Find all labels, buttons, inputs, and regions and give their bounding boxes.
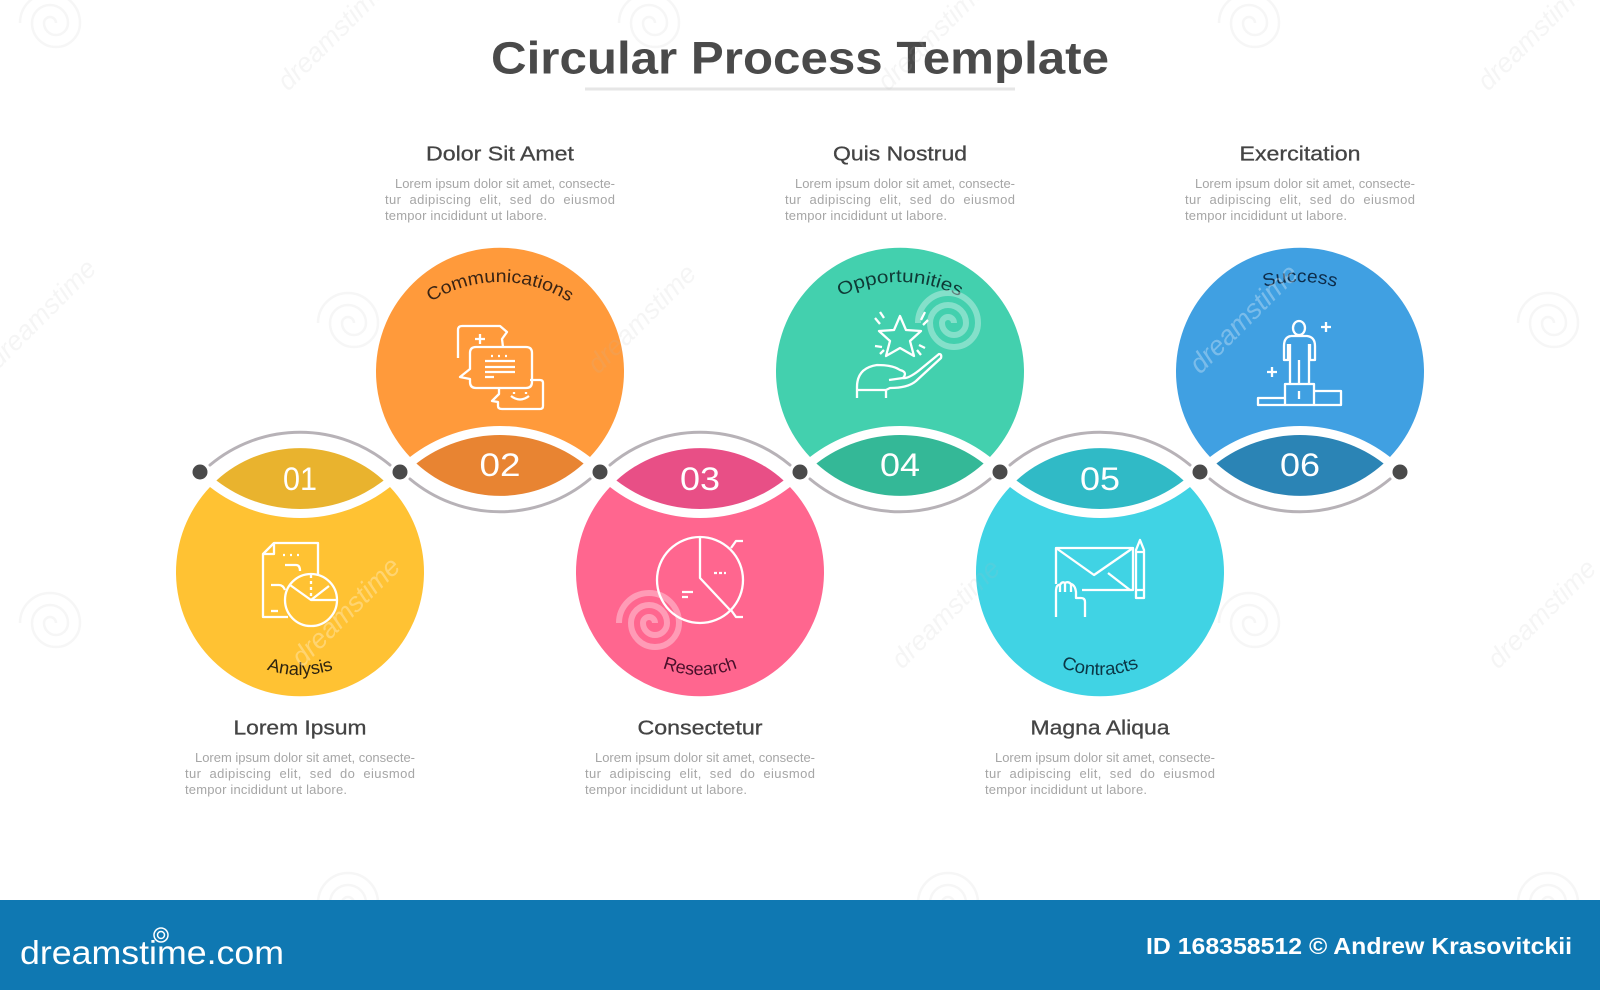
- step 03: research: [576, 430, 824, 696]
- step 06: success: [1176, 248, 1424, 514]
- text block: Lorem Ipsum: Lorem ipsum dolor sit amet, consecte-: [195, 750, 415, 765]
- text block: Lorem Ipsum: tur adipiscing elit, sed do eiusmod: [185, 766, 415, 781]
- footer credit: ID 168358512 © Andrew Krasovitckii: [1146, 933, 1572, 959]
- number 02: 02: [480, 447, 520, 483]
- text block: Magna Aliqua: Lorem ipsum dolor sit amet, consecte-: [995, 750, 1215, 765]
- text block: Quis Nostrud: Quis Nostrud: [833, 142, 967, 166]
- curved label: Research: Research: [664, 656, 736, 676]
- text block: Dolor Sit Amet: Dolor Sit Amet: [426, 142, 574, 166]
- icon: hand holding star: [857, 312, 941, 398]
- title: Circular Process Template: [491, 32, 1109, 84]
- text block: Quis Nostrud: tur adipiscing elit, sed do eiusmod: [785, 192, 1015, 207]
- step 05: contracts: [976, 430, 1224, 696]
- connector arc 06: [1210, 479, 1390, 512]
- circle 02: [376, 248, 624, 457]
- lens 03: [616, 448, 784, 509]
- text block: Magna Aliqua: tur adipiscing elit, sed do eiusmod: [985, 766, 1215, 781]
- connector arc 05: [1010, 432, 1190, 465]
- connector arc 02: [410, 479, 590, 512]
- step 04: opportunities: [776, 248, 1024, 514]
- connector arc 04: [810, 479, 990, 512]
- text block: Consectetur: tur adipiscing elit, sed do eiusmod: [585, 766, 815, 781]
- number 03: 03: [680, 461, 720, 497]
- watermark overlay: dreamstime: [1481, 553, 1600, 674]
- curved label: Communications: Communications: [428, 269, 572, 300]
- curved label: Opportunities: Opportunities: [838, 270, 962, 296]
- text block: Quis Nostrud: tempor incididunt ut labore.: [785, 208, 947, 223]
- lens 04: [816, 435, 984, 496]
- number 05: 05: [1080, 461, 1120, 497]
- text block: Dolor Sit Amet: Lorem ipsum dolor sit amet, consecte-: [395, 176, 615, 191]
- text block: Magna Aliqua: Magna Aliqua: [1030, 716, 1170, 740]
- number 04: 04: [880, 447, 920, 483]
- curved label: Success: Success: [1263, 272, 1337, 286]
- step 02: communications: [376, 248, 624, 514]
- circle 06: [1176, 248, 1424, 457]
- text block: Consectetur: Consectetur: [638, 716, 763, 740]
- text block: Exercitation: tempor incididunt ut labore.: [1185, 208, 1347, 223]
- circle 01: [176, 487, 424, 696]
- curved label: Contracts: Contracts: [1064, 657, 1138, 676]
- text block: Exercitation: Exercitation: [1240, 142, 1360, 166]
- text block: Quis Nostrud: [785, 142, 1015, 223]
- text block: Dolor Sit Amet: tempor incididunt ut labore.: [385, 208, 547, 223]
- curved label: Analysis: Analysis: [266, 659, 332, 679]
- text block: Lorem Ipsum: Lorem Ipsum: [234, 716, 366, 740]
- number 01: 01: [283, 461, 317, 497]
- watermark overlay: dreamstime: [885, 553, 1006, 674]
- lens 06: [1216, 435, 1384, 496]
- text block: Quis Nostrud: Lorem ipsum dolor sit amet, consecte-: [795, 176, 1015, 191]
- footer logo spiral: [154, 928, 168, 942]
- watermark overlay: dreamstime: [1183, 258, 1304, 379]
- footer logo: dreamstime.com: [20, 934, 284, 971]
- text block: Lorem Ipsum: tempor incididunt ut labore.: [185, 782, 347, 797]
- icon: figure on podium: [1258, 321, 1341, 405]
- lens 02: [416, 435, 584, 496]
- text block: Lorem Ipsum: [185, 716, 415, 797]
- circle 03: [576, 487, 824, 696]
- footer bar: [0, 900, 1600, 990]
- text block: Exercitation: tur adipiscing elit, sed do eiusmod: [1185, 192, 1415, 207]
- text block: Dolor Sit Amet: [385, 142, 615, 223]
- connector arc 03: [610, 432, 790, 465]
- step 01: analysis: [176, 430, 424, 696]
- connection nodes: [192, 464, 1408, 480]
- text block: Consectetur: Lorem ipsum dolor sit amet, consecte-: [595, 750, 815, 765]
- number 06: 06: [1280, 447, 1320, 483]
- icon: envelope, pencil and hand: [1056, 540, 1144, 617]
- text block: Magna Aliqua: [985, 716, 1215, 797]
- text block: Magna Aliqua: tempor incididunt ut labore.: [985, 782, 1147, 797]
- icon: document and pie chart: [263, 543, 337, 626]
- text block: Consectetur: tempor incididunt ut labore.: [585, 782, 747, 797]
- watermark overlay: dreamstime: [285, 551, 406, 672]
- text block: Consectetur: [585, 716, 815, 797]
- text block: Exercitation: [1185, 142, 1415, 223]
- circle 05: [976, 487, 1224, 696]
- lens 01: [216, 448, 384, 509]
- circle 04: [776, 248, 1024, 457]
- icon: pie chart with labels: [657, 537, 743, 623]
- text block: Exercitation: Lorem ipsum dolor sit amet, consecte-: [1195, 176, 1415, 191]
- icon: chat bubbles: [458, 326, 543, 409]
- title underline: [585, 88, 1015, 90]
- watermark overlay: dreamstime: [581, 258, 702, 379]
- lens 05: [1016, 448, 1184, 509]
- text block: Dolor Sit Amet: tur adipiscing elit, sed do eiusmod: [385, 192, 615, 207]
- connector arc 01: [210, 432, 390, 465]
